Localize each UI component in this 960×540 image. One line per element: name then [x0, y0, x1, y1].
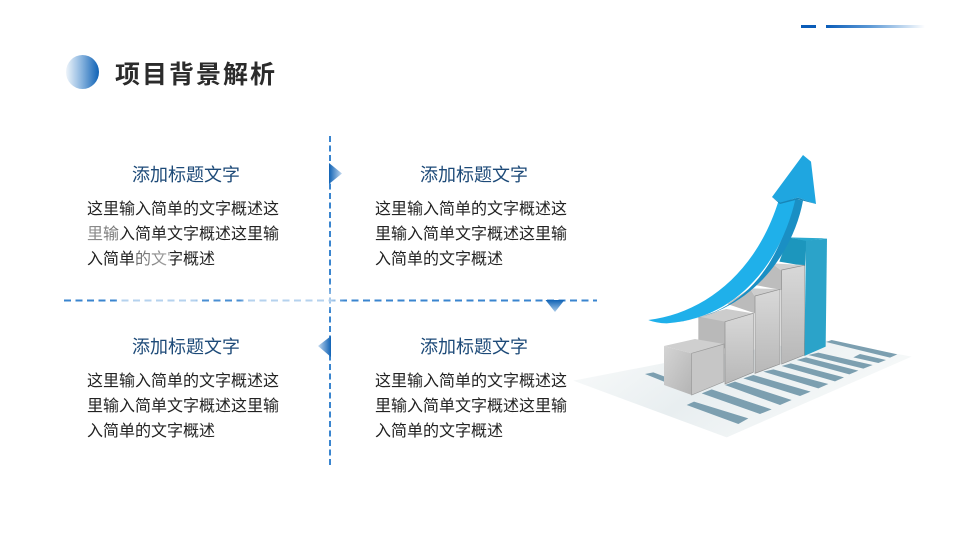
heading: 添加标题文字 — [420, 337, 528, 357]
chart floor — [573, 340, 912, 437]
arrow head — [772, 155, 816, 204]
teal back bar — [779, 237, 827, 356]
body text: 里输入简单文字概述这里输 — [375, 226, 567, 243]
body text — [87, 200, 279, 268]
grey cube 1 — [664, 339, 724, 395]
body text — [87, 372, 279, 440]
illustration: 3D bar chart with rising arrow — [574, 155, 911, 438]
triangle marker: down — [546, 300, 564, 312]
top-right accent bars — [801, 25, 922, 28]
body text: 里输入简单文字概述这里输 — [87, 226, 279, 243]
body text — [375, 372, 567, 440]
triangle marker: top right — [329, 163, 342, 184]
body text — [375, 200, 567, 268]
arrow underside — [670, 199, 803, 323]
body text: 这里输入简单的文字概述这 — [87, 373, 279, 390]
body text: 入简单的文字概述 — [87, 251, 215, 268]
text block: top right — [375, 165, 567, 268]
icon: title gradient circle — [66, 55, 99, 89]
text block: top left — [87, 165, 279, 268]
heading: 添加标题文字 — [420, 165, 528, 185]
body text: 入简单的文字概述 — [375, 423, 503, 440]
body text: 入简单的文字概述 — [375, 251, 503, 268]
body text: 这里输入简单的文字概述这 — [87, 201, 279, 218]
heading: 添加标题文字 — [132, 337, 240, 357]
text block: bottom right — [375, 337, 567, 440]
floor stripes — [645, 340, 897, 424]
heading: 添加标题文字 — [132, 165, 240, 185]
arrow shaft — [648, 199, 795, 323]
body text: 里输入简单文字概述这里输 — [375, 398, 567, 415]
title: 项目背景解析 — [115, 61, 277, 89]
grey bar 3 — [727, 288, 780, 373]
rising arrow — [648, 155, 816, 323]
body text: 这里输入简单的文字概述这 — [375, 201, 567, 218]
grey bar 2 — [698, 309, 753, 384]
triangle marker: left — [318, 336, 331, 357]
grey bar 4 — [755, 263, 804, 364]
text block: bottom left — [87, 337, 279, 440]
body text: 入简单的文字概述 — [87, 423, 215, 440]
body text: 这里输入简单的文字概述这 — [375, 373, 567, 390]
body text: 里输入简单文字概述这里输 — [87, 398, 279, 415]
